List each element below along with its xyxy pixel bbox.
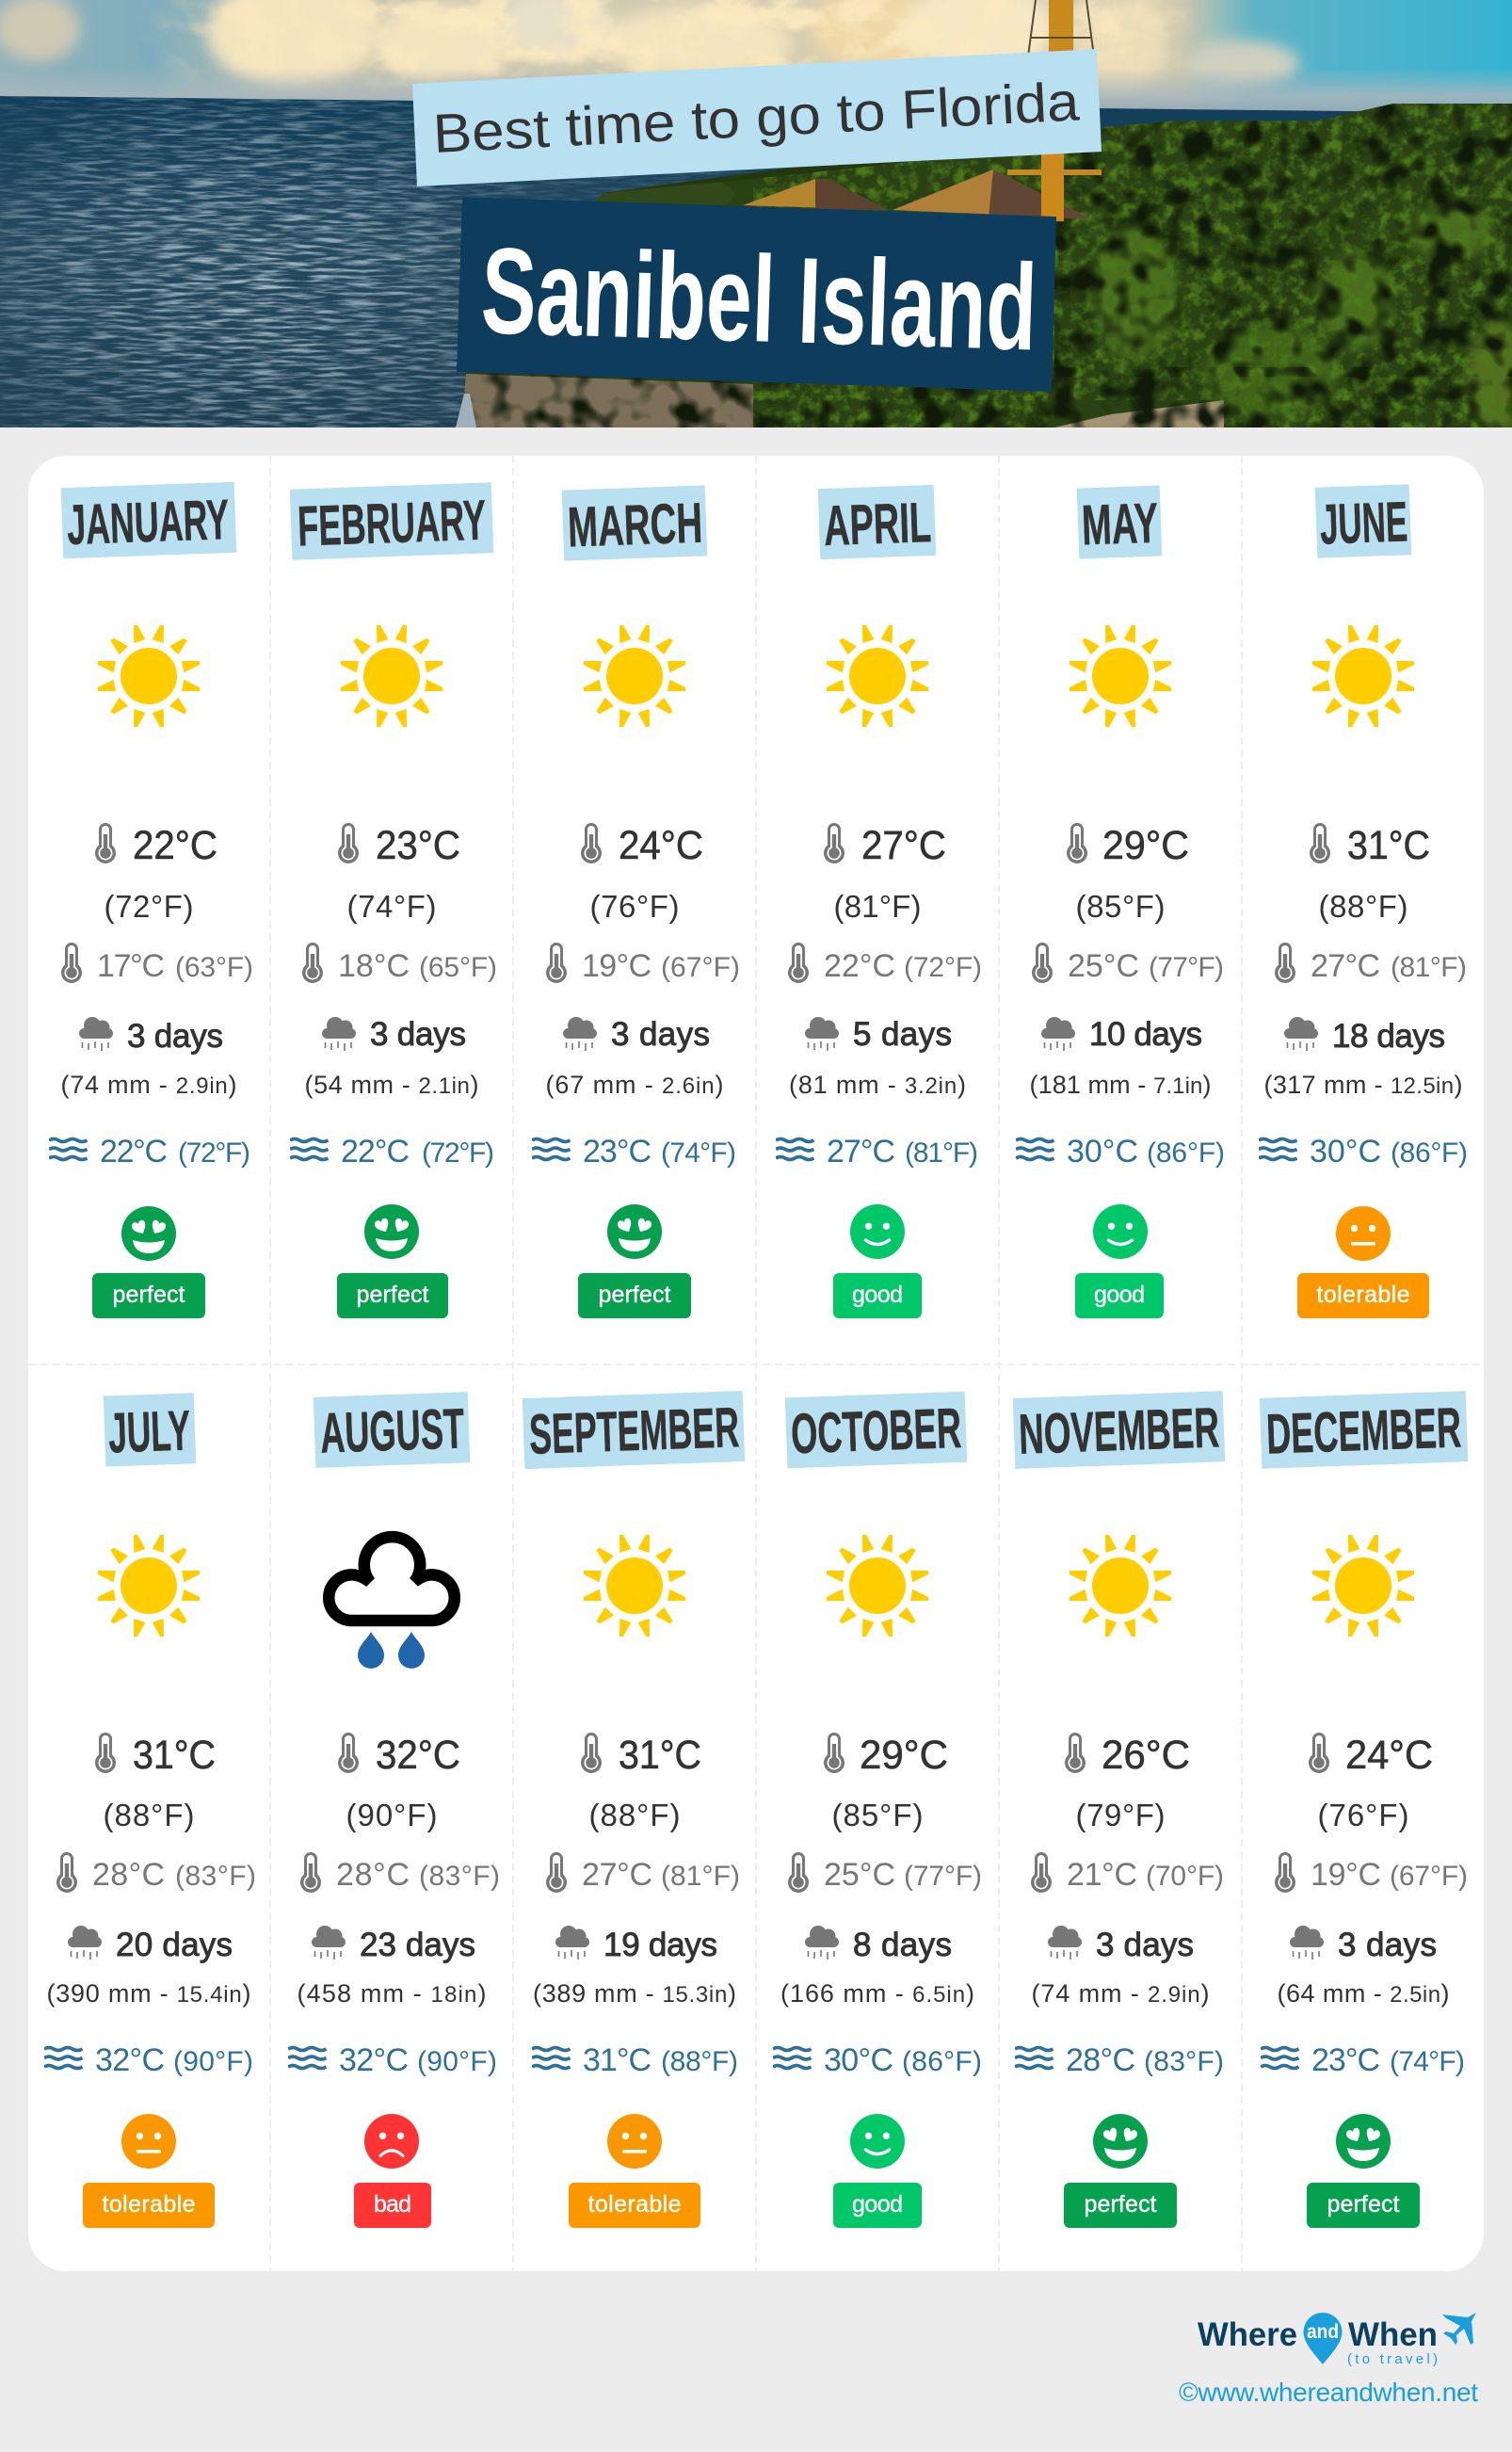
high temperature: 24°C xyxy=(619,823,703,868)
high temperature fahrenheit: (72°F) xyxy=(104,889,194,924)
high temperature xyxy=(338,823,460,868)
rainfall amount: (81 mm - 3.2in) xyxy=(789,1071,966,1099)
icon: sun xyxy=(584,1535,685,1637)
sea temperature: (74°F) xyxy=(1390,2046,1465,2077)
month column: April xyxy=(776,485,982,1318)
rating badge xyxy=(1307,2183,1420,2228)
sea temperature: 32°C xyxy=(339,2042,409,2078)
rainy days xyxy=(79,1017,223,1055)
title banner: Sanibel Island xyxy=(457,197,1056,392)
website credit: ©www.whereandwhen.net xyxy=(1179,2378,1478,2407)
icon: sun xyxy=(1312,625,1414,727)
rating badge xyxy=(337,1273,448,1318)
high temperature fahrenheit: (88°F) xyxy=(104,1798,194,1832)
smiley: perfect xyxy=(1336,2114,1391,2169)
month column: November xyxy=(1013,1391,1225,2228)
low temperature: (77°F) xyxy=(904,1861,982,1892)
rating badge: perfect xyxy=(113,1282,185,1308)
high temperature xyxy=(338,1733,460,1778)
month label: FEBRUARY xyxy=(297,489,487,557)
month column: February xyxy=(290,482,497,1318)
low temperature: 17°C xyxy=(97,948,165,984)
logo: Where and When to travel xyxy=(1198,2313,1476,2367)
rainy days xyxy=(563,1016,710,1053)
sea temperature: 27°C xyxy=(827,1134,895,1170)
smiley: perfect xyxy=(607,1204,662,1259)
high temperature xyxy=(581,823,703,868)
low temperature xyxy=(546,943,740,984)
sea temperature: 23°C xyxy=(583,1134,651,1170)
low temperature: (67°F) xyxy=(661,952,740,983)
rainfall amount: (181 mm - 7.1in) xyxy=(1030,1071,1211,1099)
rainy days xyxy=(555,1926,717,1963)
rainy days xyxy=(805,1016,952,1053)
high temperature fahrenheit: (74°F) xyxy=(346,889,437,924)
icon: sun xyxy=(1312,1535,1414,1637)
sea temperature xyxy=(1259,1134,1468,1170)
rainy days: 3 days xyxy=(1338,1927,1437,1963)
low temperature: (81°F) xyxy=(661,1861,740,1892)
high temperature fahrenheit: (79°F) xyxy=(1075,1798,1166,1832)
sea temperature xyxy=(290,1134,494,1170)
sea temperature: (74°F) xyxy=(661,1137,736,1169)
rating badge: tolerable xyxy=(102,2191,196,2218)
high temperature fahrenheit: (88°F) xyxy=(1318,889,1408,924)
sea temperature: (88°F) xyxy=(661,2046,738,2077)
rating badge: good xyxy=(852,1282,903,1308)
month column: August xyxy=(288,1392,500,2228)
rainfall amount: (74 mm - 2.9in) xyxy=(1032,1979,1209,2008)
sea temperature xyxy=(288,2042,497,2078)
rainy days: 5 days xyxy=(853,1016,952,1053)
smiley: perfect xyxy=(1093,2114,1148,2169)
sea temperature: 22°C xyxy=(341,1134,410,1170)
smiley: tolerable xyxy=(607,2114,662,2169)
rating badge xyxy=(833,2183,922,2228)
high temperature: 23°C xyxy=(376,823,460,868)
low temperature xyxy=(1031,1852,1224,1893)
rainfall amount: (458 mm - 18in) xyxy=(298,1979,486,2008)
high temperature xyxy=(1065,1733,1190,1778)
month label: JANUARY xyxy=(66,488,230,557)
month column: October xyxy=(773,1392,982,2228)
sea temperature: (86°F) xyxy=(1391,1137,1468,1169)
sea temperature xyxy=(1016,1134,1225,1170)
low temperature xyxy=(788,943,982,984)
rainy days xyxy=(68,1926,233,1963)
rating badge xyxy=(1064,2183,1177,2228)
month column: June xyxy=(1259,484,1468,1318)
icon: sun xyxy=(827,625,928,727)
low temperature: (83°F) xyxy=(175,1861,256,1892)
sea temperature: (90°F) xyxy=(417,2046,497,2077)
low temperature: (83°F) xyxy=(419,1861,500,1892)
smiley: good xyxy=(850,1204,905,1259)
high temperature fahrenheit: (81°F) xyxy=(834,889,921,924)
title banner: Sanibel Island: Sanibel Island xyxy=(479,221,1038,377)
low temperature: (67°F) xyxy=(1390,1861,1468,1892)
rainy days: 18 days xyxy=(1332,1018,1445,1055)
sea temperature xyxy=(49,1134,250,1170)
smiley: good xyxy=(850,2114,905,2169)
sea temperature xyxy=(44,2042,253,2078)
rating badge xyxy=(569,2183,700,2228)
month label xyxy=(562,485,707,561)
low temperature: (63°F) xyxy=(175,952,253,983)
high temperature fahrenheit: (88°F) xyxy=(589,1798,680,1832)
high temperature: 22°C xyxy=(133,823,217,868)
sea temperature xyxy=(773,2042,982,2078)
logo: Where and When to travel: (to travel) xyxy=(1347,2351,1438,2367)
sea temperature: 30°C xyxy=(1310,1134,1381,1170)
icon: sun xyxy=(98,625,200,727)
smiley: bad xyxy=(364,2114,419,2169)
high temperature: 24°C xyxy=(1345,1733,1433,1778)
high temperature: 32°C xyxy=(376,1733,460,1778)
sea temperature: (81°F) xyxy=(905,1137,978,1169)
month label xyxy=(818,485,936,559)
smiley: tolerable xyxy=(121,2114,176,2169)
high temperature fahrenheit: (76°F) xyxy=(589,889,680,924)
icon: sun xyxy=(827,1535,928,1637)
high temperature fahrenheit: (85°F) xyxy=(832,1798,923,1832)
month label: JUNE xyxy=(1319,490,1408,557)
low temperature xyxy=(302,943,497,984)
icon: sun xyxy=(98,1535,200,1637)
month label xyxy=(290,482,493,560)
high temperature xyxy=(1309,1733,1433,1778)
month label xyxy=(1077,486,1162,559)
smiley: tolerable xyxy=(1336,1206,1391,1261)
high temperature fahrenheit: (90°F) xyxy=(346,1798,437,1832)
smiley: perfect xyxy=(364,1204,419,1259)
title banner: Best time to go to Florida: Best time to go to Florida xyxy=(431,71,1082,165)
month label xyxy=(104,1393,196,1467)
high temperature: 31°C xyxy=(619,1733,701,1778)
sea temperature: 31°C xyxy=(583,2042,651,2078)
low temperature: 19°C xyxy=(582,948,651,984)
month label: AUGUST xyxy=(319,1396,465,1465)
month label: OCTOBER xyxy=(790,1396,962,1465)
sea temperature: 30°C xyxy=(1067,1134,1138,1170)
high temperature fahrenheit: (85°F) xyxy=(1075,889,1166,924)
rating badge xyxy=(354,2183,431,2228)
logo: Where and When to travel: Where xyxy=(1198,2316,1297,2353)
rainy days: 19 days xyxy=(603,1927,717,1963)
rating badge: good xyxy=(1094,1282,1145,1308)
low temperature: (81°F) xyxy=(1391,952,1467,983)
rating badge: tolerable xyxy=(1316,1282,1410,1308)
smiley: good xyxy=(1093,1204,1148,1259)
month label: SEPTEMBER xyxy=(528,1395,740,1466)
month label xyxy=(61,482,236,558)
sea temperature: (72°F) xyxy=(178,1137,250,1169)
rainfall amount: (67 mm - 2.6in) xyxy=(546,1071,723,1099)
rainy days: 20 days xyxy=(116,1927,233,1963)
rainy days: 8 days xyxy=(853,1927,952,1963)
rainfall amount: (166 mm - 6.5in) xyxy=(780,1979,974,2008)
sea temperature: 22°C xyxy=(100,1134,168,1170)
rainfall amount: (64 mm - 2.5in) xyxy=(1277,1979,1450,2008)
low temperature xyxy=(300,1852,500,1893)
low temperature: (65°F) xyxy=(419,952,497,983)
rating badge: bad xyxy=(374,2191,411,2218)
logo: Where and When to travel: and xyxy=(1307,2321,1339,2343)
rainfall amount: (74 mm - 2.9in) xyxy=(60,1071,237,1099)
sea temperature xyxy=(532,2042,738,2078)
icon: rain cloud xyxy=(329,1537,455,1669)
rating badge: tolerable xyxy=(587,2191,682,2218)
rating badge xyxy=(578,1273,691,1318)
low temperature: (70°F) xyxy=(1146,1861,1224,1892)
month column: May xyxy=(1016,486,1225,1318)
rainfall amount: (317 mm - 12.5in) xyxy=(1263,1071,1463,1099)
low temperature xyxy=(1032,943,1224,984)
rainy days: 23 days xyxy=(360,1927,475,1963)
header photo: sea, clouds and palm-covered shore xyxy=(0,0,1512,433)
month label: MARCH xyxy=(567,492,703,558)
logo: Where and When to travel: When xyxy=(1348,2316,1438,2353)
rainfall amount: (389 mm - 15.3in) xyxy=(533,1979,736,2008)
sea temperature: (83°F) xyxy=(1144,2046,1224,2077)
low temperature: 21°C xyxy=(1067,1857,1137,1893)
month column: September xyxy=(523,1391,745,2228)
month label: MAY xyxy=(1081,492,1159,557)
rainy days xyxy=(1290,1926,1437,1963)
low temperature: 27°C xyxy=(582,1857,652,1893)
high temperature xyxy=(95,823,217,868)
low temperature xyxy=(546,1852,740,1893)
sea temperature: 32°C xyxy=(95,2042,165,2078)
high temperature fahrenheit: (76°F) xyxy=(1318,1798,1408,1832)
month column: March xyxy=(532,485,740,1318)
high temperature: 31°C xyxy=(1347,823,1430,868)
sea temperature: (90°F) xyxy=(173,2046,253,2077)
rainy days: 10 days xyxy=(1089,1016,1202,1053)
rating badge: perfect xyxy=(599,1282,671,1308)
rating badge: perfect xyxy=(356,1282,429,1308)
smiley: perfect xyxy=(121,1206,176,1261)
rating badge xyxy=(833,1273,922,1318)
rainy days: 3 days xyxy=(127,1018,223,1055)
low temperature: 28°C xyxy=(92,1857,165,1893)
low temperature: (77°F) xyxy=(1149,952,1224,983)
low temperature xyxy=(56,1852,256,1893)
low temperature xyxy=(61,943,253,984)
low temperature: 25°C xyxy=(824,1857,895,1893)
high temperature xyxy=(1067,823,1189,868)
high temperature: 27°C xyxy=(861,823,946,868)
low temperature: (72°F) xyxy=(904,952,982,983)
sea temperature: 28°C xyxy=(1066,2042,1135,2078)
panel: monthly climate table xyxy=(28,456,1484,2271)
low temperature xyxy=(1275,1852,1468,1893)
rating badge xyxy=(92,1273,205,1318)
rating badge: perfect xyxy=(1085,2191,1157,2218)
rating badge xyxy=(83,2183,215,2228)
rainy days: 3 days xyxy=(611,1016,710,1053)
sea temperature: (86°F) xyxy=(902,2046,982,2077)
month label xyxy=(1013,1391,1225,1469)
month label: NOVEMBER xyxy=(1018,1395,1220,1466)
high temperature xyxy=(95,1733,216,1778)
rating badge xyxy=(1075,1273,1164,1318)
rating badge: perfect xyxy=(1327,2191,1400,2218)
rainy days: 3 days xyxy=(1096,1927,1194,1963)
icon: sun xyxy=(1070,625,1171,727)
month column: July xyxy=(44,1393,256,2228)
sea temperature: 30°C xyxy=(824,2042,893,2078)
month label xyxy=(314,1392,470,1468)
low temperature xyxy=(1275,943,1467,984)
low temperature: 19°C xyxy=(1311,1857,1381,1893)
sea temperature xyxy=(776,1134,978,1170)
rainfall amount: (54 mm - 2.1in) xyxy=(305,1071,478,1099)
low temperature: 22°C xyxy=(824,948,895,984)
sea temperature: 23°C xyxy=(1311,2042,1380,2078)
sea temperature xyxy=(1261,2042,1465,2078)
high temperature xyxy=(1310,823,1430,868)
rainy days xyxy=(322,1016,466,1053)
rainy days: 3 days xyxy=(370,1016,466,1053)
month label: APRIL xyxy=(823,491,932,557)
low temperature: 18°C xyxy=(338,948,410,984)
title banner: Best time to go to Florida xyxy=(412,49,1102,186)
icon: sun xyxy=(341,625,442,727)
icon: sun xyxy=(584,625,685,727)
rainy days xyxy=(1048,1926,1194,1963)
high temperature xyxy=(581,1733,701,1778)
high temperature xyxy=(824,823,946,868)
icon: sun xyxy=(1070,1535,1171,1637)
high temperature: 29°C xyxy=(860,1733,948,1778)
month label xyxy=(1315,484,1411,558)
month column: December xyxy=(1260,1391,1468,2228)
month label: JULY xyxy=(107,1398,191,1464)
month label xyxy=(523,1391,745,1469)
rating badge: good xyxy=(852,2191,903,2218)
low temperature: 27°C xyxy=(1311,948,1380,984)
sea temperature: (86°F) xyxy=(1147,1137,1225,1169)
sea temperature xyxy=(532,1134,736,1170)
sea temperature: (72°F) xyxy=(422,1137,494,1169)
month column: January xyxy=(49,482,253,1318)
high temperature: 26°C xyxy=(1102,1733,1190,1778)
low temperature: 28°C xyxy=(336,1857,410,1893)
sea temperature xyxy=(1015,2042,1224,2078)
rainfall amount: (390 mm - 15.4in) xyxy=(47,1979,250,2008)
rating badge xyxy=(1297,1273,1429,1318)
high temperature: 29°C xyxy=(1102,823,1189,868)
low temperature: 25°C xyxy=(1068,948,1139,984)
rainy days xyxy=(805,1926,952,1963)
low temperature xyxy=(788,1852,982,1893)
rainy days xyxy=(312,1926,475,1963)
high temperature: 31°C xyxy=(133,1733,216,1778)
month label xyxy=(785,1392,967,1468)
rainy days xyxy=(1284,1017,1445,1055)
